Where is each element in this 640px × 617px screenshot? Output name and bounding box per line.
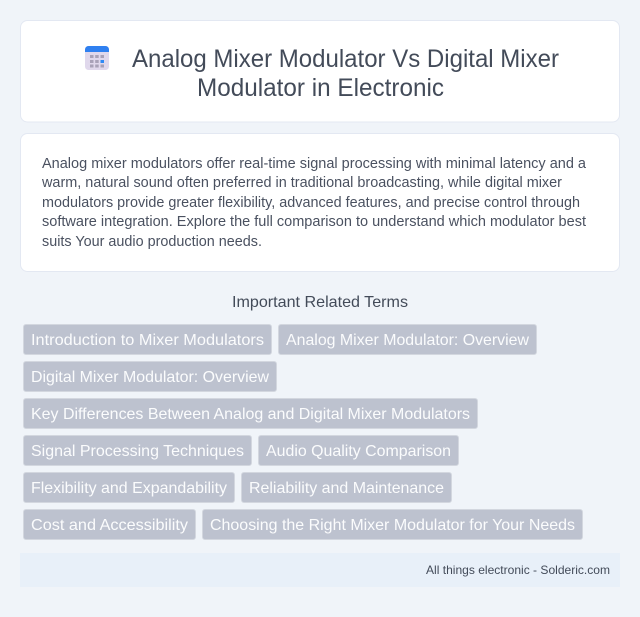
tag [242, 472, 452, 502]
tag: Analog Mixer Modulator: Overview [286, 332, 529, 349]
tag [24, 324, 272, 354]
tag [24, 436, 252, 466]
title [132, 45, 559, 102]
tag [202, 510, 582, 540]
tag: Digital Mixer Modulator: Overview [31, 369, 269, 386]
summary text: suits Your audio production needs. [42, 234, 262, 250]
tag: Cost and Accessibility [31, 517, 188, 534]
summary text [41, 156, 587, 250]
tag: Choosing the Right Mixer Modulator for Your Needs [210, 517, 575, 534]
tag: Signal Processing Techniques [31, 443, 244, 460]
summary text: Analog mixer modulators offer real-time signal processing with minimal latency and a [42, 156, 587, 172]
heading: important related terms: Important Related Terms [232, 294, 408, 311]
tag: Flexibility and Expandability [31, 480, 227, 497]
panel: summary card [20, 134, 620, 272]
tag: Introduction to Mixer Modulators [31, 332, 264, 349]
tag [24, 362, 276, 392]
tag [24, 472, 234, 502]
panel: title card [20, 20, 620, 122]
tag [258, 436, 458, 466]
footer bar: All things electronic - Solderic.com [426, 563, 610, 577]
summary text: software integration. Explore the full comparison to understand which modulator best [42, 214, 586, 230]
tag [278, 324, 536, 354]
tag: Audio Quality Comparison [266, 443, 451, 460]
tag: Key Differences Between Analog and Digital Mixer Modulators [31, 406, 470, 423]
title: Modulator in Electronic [197, 74, 444, 102]
summary text: warm, natural sound often preferred in traditional broadcasting, while digital mixer [41, 175, 562, 191]
footer bar [20, 553, 620, 587]
icon: calendar grid [85, 46, 109, 70]
tag: Reliability and Maintenance [249, 480, 444, 497]
tag [24, 510, 196, 540]
tag [24, 398, 478, 428]
tag list [24, 324, 582, 540]
title: Analog Mixer Modulator Vs Digital Mixer [132, 45, 559, 73]
summary text: modulators provide greater flexibility, advanced features, and precise control through [42, 195, 580, 211]
